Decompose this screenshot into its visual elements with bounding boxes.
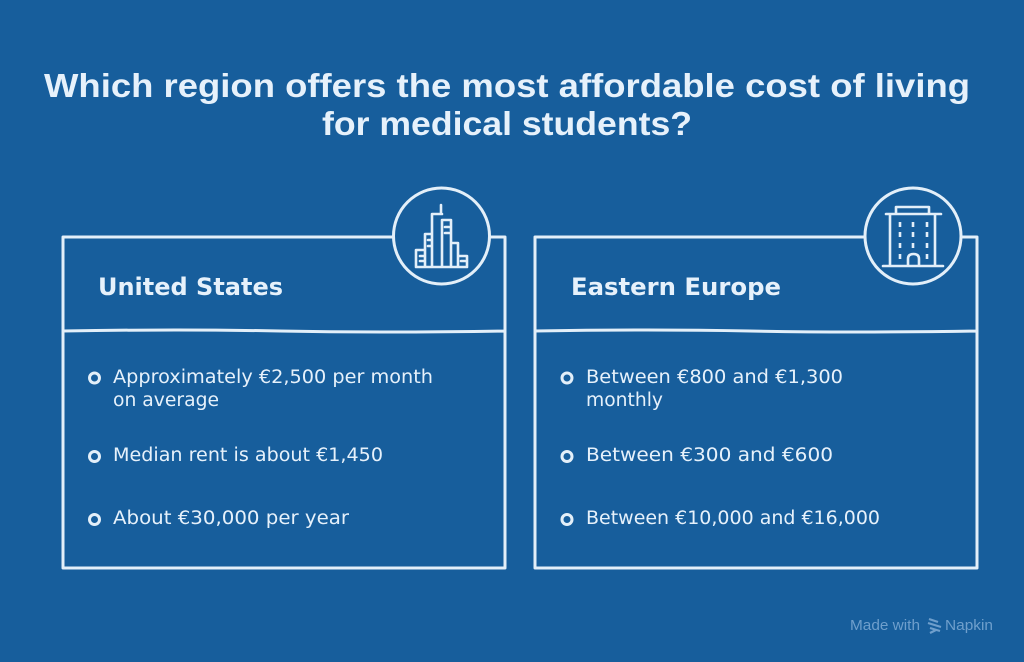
bullet: monthly cost: Between €800 and €1,300 — [586, 367, 843, 388]
bullet: monthly cost: monthly — [586, 390, 663, 411]
bullet: monthly cost — [90, 367, 433, 411]
bullet: yearly cost: About €30,000 per year — [113, 508, 349, 529]
bullet: rent: Between €300 and €600 — [586, 445, 833, 466]
title: Which region offers the most affordable cost of living — [44, 67, 970, 104]
bullet: yearly cost: Between €10,000 and €16,000 — [586, 508, 880, 529]
panel: Eastern Europe — [535, 188, 977, 568]
bullet: median rent: Median rent is about €1,450 — [113, 445, 383, 466]
heading: Eastern Europe: Eastern Europe — [571, 273, 781, 301]
heading: United States: United States — [98, 273, 283, 301]
icon: Napkin logo — [928, 619, 941, 633]
title — [44, 67, 970, 142]
bullet: monthly cost — [562, 367, 843, 411]
list: United States figures — [90, 367, 433, 529]
icon: office building — [865, 188, 961, 284]
list: Eastern Europe figures — [562, 367, 880, 529]
bullet: monthly cost: on average — [113, 390, 219, 411]
watermark: Made with Napkin — [850, 617, 993, 634]
panel outline — [535, 237, 977, 568]
watermark: Made with Napkin: Made with — [850, 617, 920, 634]
panel outline — [63, 237, 505, 568]
watermark: Made with Napkin: Napkin — [945, 617, 993, 634]
panel: United States — [63, 188, 505, 568]
title: for medical students? — [322, 105, 692, 142]
bullet: monthly cost: Approximately €2,500 per month — [113, 367, 433, 388]
icon: skyscrapers — [394, 188, 490, 284]
